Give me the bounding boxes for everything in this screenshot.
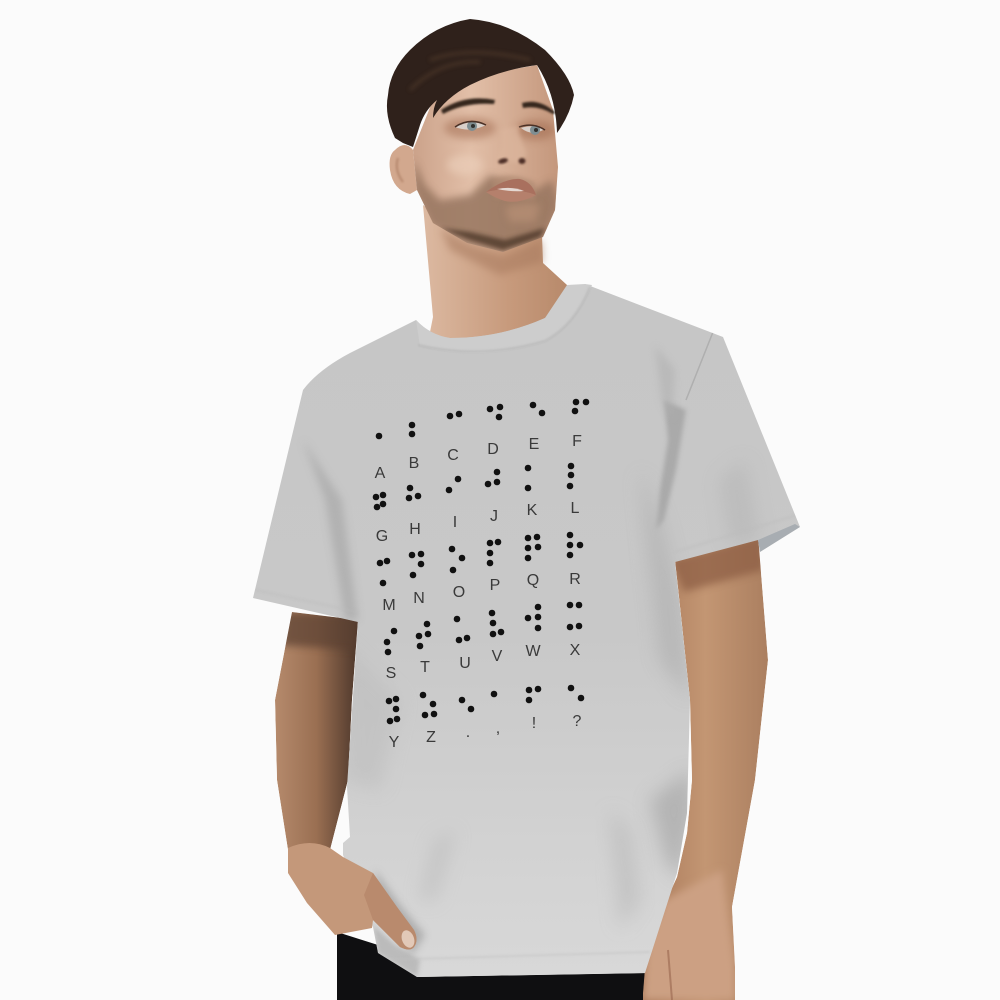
collar <box>416 284 592 353</box>
product photo: man wearing braille alphabet t-shirt <box>253 19 800 1000</box>
row 5: Y, Z and punctuation <box>386 685 584 751</box>
row 5: Y, Z and punctuation: ? <box>573 713 582 730</box>
ear <box>390 145 417 194</box>
row 1: A to F <box>375 399 589 482</box>
t-shirt <box>253 284 800 977</box>
left hand with thumb <box>288 843 417 950</box>
neck <box>423 205 595 350</box>
row 2: G to L: H <box>409 521 421 538</box>
row 4: S to X <box>384 602 582 682</box>
hair <box>387 19 574 147</box>
row 3: M to R <box>377 532 583 614</box>
beard <box>414 160 560 254</box>
eye shadow <box>444 117 496 139</box>
left arm <box>275 612 362 850</box>
row 2: G to L: K <box>527 502 538 519</box>
trousers <box>337 932 650 1000</box>
row 5: Y, Z and punctuation: . <box>466 724 470 741</box>
row 4: S to X: T <box>420 659 430 676</box>
row 1: A to F: F <box>572 433 582 450</box>
right arm and hand <box>643 535 768 1000</box>
row 2: G to L: I <box>453 514 457 531</box>
row 1: A to F: B <box>409 455 419 472</box>
mouth <box>486 179 536 195</box>
row 5: Y, Z and punctuation: Z <box>426 729 436 746</box>
row 5: Y, Z and punctuation: Y <box>389 734 400 751</box>
eyebrows <box>441 98 495 114</box>
row 1: A to F: C <box>447 447 459 464</box>
row 3: M to R: P <box>490 577 500 594</box>
braille alphabet chart <box>373 399 589 751</box>
row 3: M to R: M <box>382 597 396 614</box>
row 3: M to R: N <box>413 590 425 607</box>
row 1: A to F: E <box>529 436 539 453</box>
row 3: M to R: R <box>569 571 581 588</box>
row 4: S to X: S <box>386 665 396 682</box>
row 2: G to L: L <box>571 500 580 517</box>
row 4: S to X: U <box>459 655 471 672</box>
row 3: M to R: Q <box>527 572 539 589</box>
row 5: Y, Z and punctuation: ! <box>532 715 536 732</box>
row 2: G to L: J <box>490 508 498 525</box>
nose <box>497 125 526 163</box>
row 3: M to R: O <box>453 584 465 601</box>
row 2: G to L <box>373 463 580 545</box>
row 5: Y, Z and punctuation: , <box>496 720 500 737</box>
row 1: A to F: A <box>375 465 386 482</box>
row 1: A to F: D <box>487 441 499 458</box>
jaw shadow <box>440 228 543 275</box>
row 2: G to L: G <box>376 528 388 545</box>
face <box>413 65 560 254</box>
row 4: S to X: W <box>525 643 541 660</box>
eyes <box>455 122 486 130</box>
row 4: S to X: X <box>570 642 581 659</box>
row 4: S to X: V <box>492 648 503 665</box>
shirt folds and shading <box>255 332 800 977</box>
